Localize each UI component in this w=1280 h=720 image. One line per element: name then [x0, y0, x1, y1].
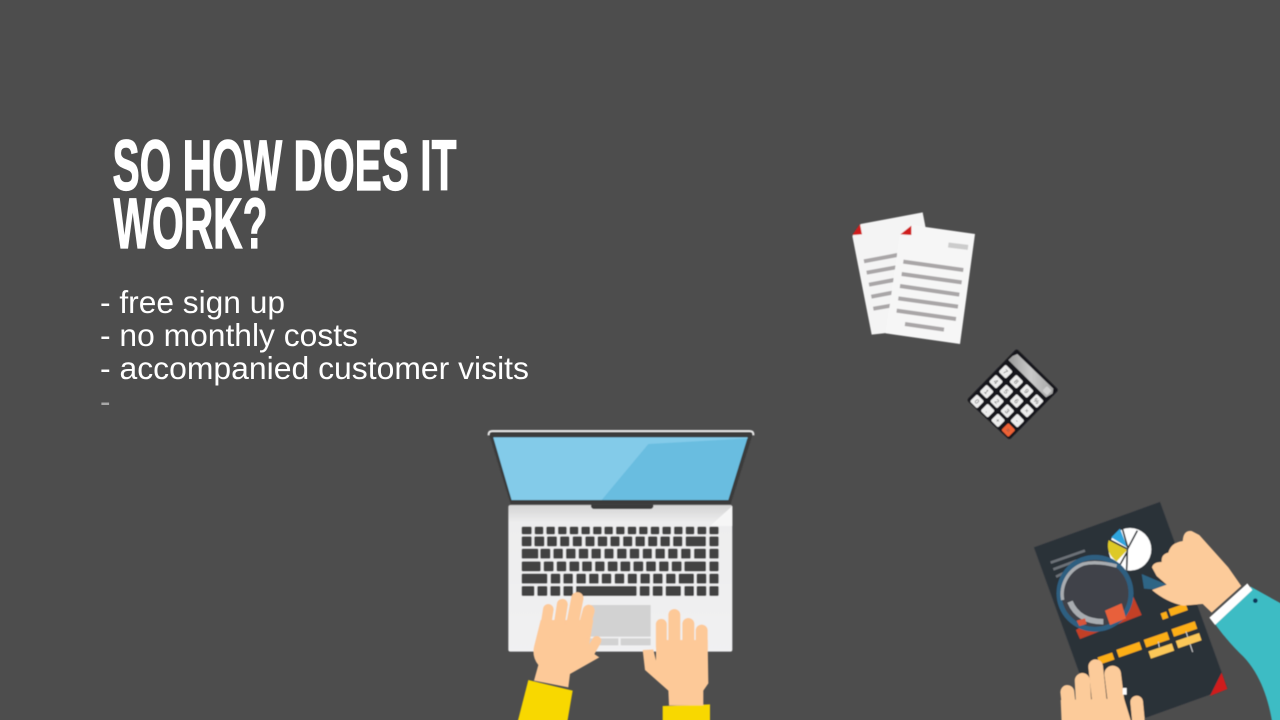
left hand [533, 598, 599, 687]
illustration: calculator: × [1023, 407, 1030, 415]
illustration: calculator: . [984, 408, 990, 415]
title: WORK? [114, 185, 268, 264]
illustration: calculator: 6 [1012, 398, 1020, 406]
red corner [1210, 673, 1227, 696]
bullet list: - [100, 383, 110, 419]
illustration: calculator: 4 [992, 379, 999, 386]
illustration: report with magnifier and hands [1034, 502, 1280, 720]
text lines [1051, 551, 1085, 577]
red bar block [1076, 597, 1142, 639]
left sleeve [518, 680, 573, 720]
white cuff [1209, 583, 1252, 625]
laptop base [508, 504, 732, 652]
keyboard [522, 527, 719, 596]
illustration: calculator [970, 352, 1055, 437]
magnifier [1059, 557, 1167, 629]
bullet list: - accompanied customer visits [100, 350, 529, 386]
specks near fingers [1123, 688, 1127, 695]
bullet list: - free sign up [100, 284, 285, 320]
pie chart [1107, 527, 1151, 571]
bullet list: - no monthly costs [100, 317, 358, 353]
bullet list [100, 284, 529, 419]
title: SO HOW DOES IT [112, 127, 456, 206]
right sleeve [663, 704, 710, 720]
illustration: calculator: 0 [973, 398, 980, 406]
illustration: calculator: 2 [993, 398, 1000, 406]
illustration: calculator: 1 [982, 389, 990, 396]
illustration: calculator: 9 [1022, 388, 1030, 396]
illustration: calculator: - [1014, 418, 1020, 424]
touchpad [588, 605, 651, 645]
teal sleeve [1215, 587, 1280, 720]
illustration: calculator: 3 [1003, 408, 1011, 416]
illustration: calculator: 7 [1001, 369, 1009, 376]
illustration: papers [852, 212, 1055, 437]
right hand [643, 615, 708, 705]
lower left hand [1061, 667, 1139, 720]
report sheet [1034, 502, 1227, 720]
back paper [852, 212, 927, 335]
upper right hand [1152, 531, 1241, 613]
orange bars [1099, 607, 1200, 661]
illustration: calculator: = [1004, 427, 1012, 435]
laptop lid [488, 431, 753, 504]
illustration: calculator: 5 [1002, 388, 1010, 396]
illustration: calculator: + [994, 417, 1001, 425]
front paper [886, 225, 975, 344]
illustration: calculator: % [1032, 397, 1041, 406]
title [112, 127, 456, 264]
illustration: calculator: 8 [1012, 379, 1020, 386]
illustration: laptop with typing hands [488, 431, 753, 720]
